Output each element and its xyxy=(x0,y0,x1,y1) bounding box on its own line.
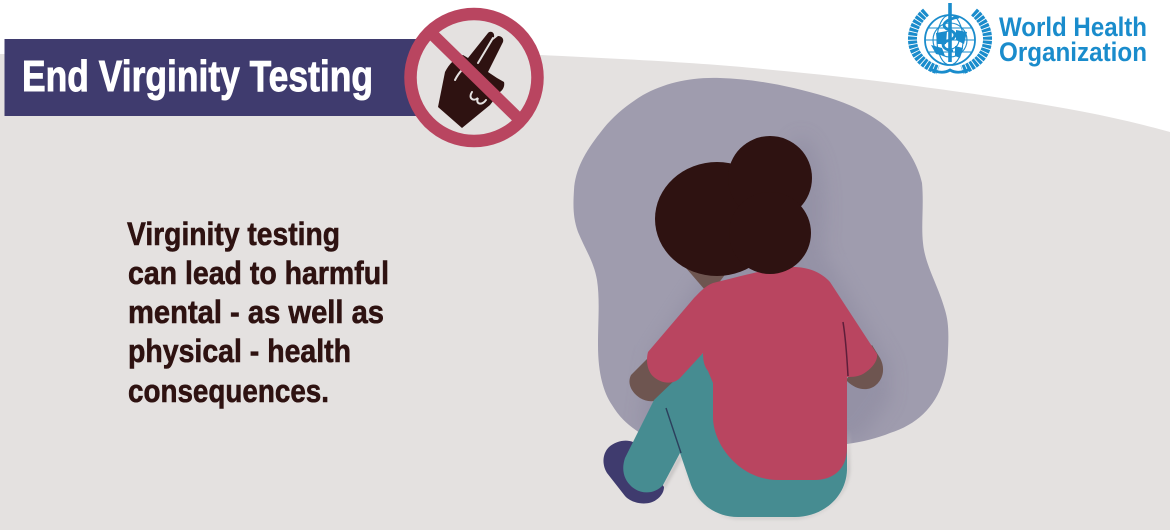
shadow blob behind figure xyxy=(573,78,948,444)
body text: mental - as well as xyxy=(128,294,384,330)
seated figure xyxy=(603,136,883,519)
sleeve fold xyxy=(843,322,848,376)
body text xyxy=(127,216,389,409)
logo wordmark xyxy=(999,12,1147,67)
hair xyxy=(655,136,812,276)
ground shadow xyxy=(663,430,850,519)
icon: prohibited hand gesture xyxy=(400,0,545,141)
neck xyxy=(686,268,730,292)
right hand xyxy=(846,345,883,389)
logo wordmark: Organization xyxy=(999,37,1147,67)
trouser seam xyxy=(666,408,681,453)
logo wordmark: World Health xyxy=(999,12,1147,42)
title banner xyxy=(4,39,420,116)
shoe xyxy=(603,441,664,503)
trousers xyxy=(623,353,847,517)
WHO logo xyxy=(912,3,1147,72)
left hand xyxy=(629,358,690,401)
body text: Virginity testing xyxy=(127,216,340,252)
title banner: End Virginity Testing xyxy=(22,52,373,101)
body text: consequences. xyxy=(128,373,329,409)
body text: can lead to harmful xyxy=(128,255,389,291)
figure shadow on wall xyxy=(648,150,884,434)
icon: WHO emblem xyxy=(912,3,988,72)
sweater xyxy=(647,267,877,480)
body text: physical - health xyxy=(128,333,351,369)
